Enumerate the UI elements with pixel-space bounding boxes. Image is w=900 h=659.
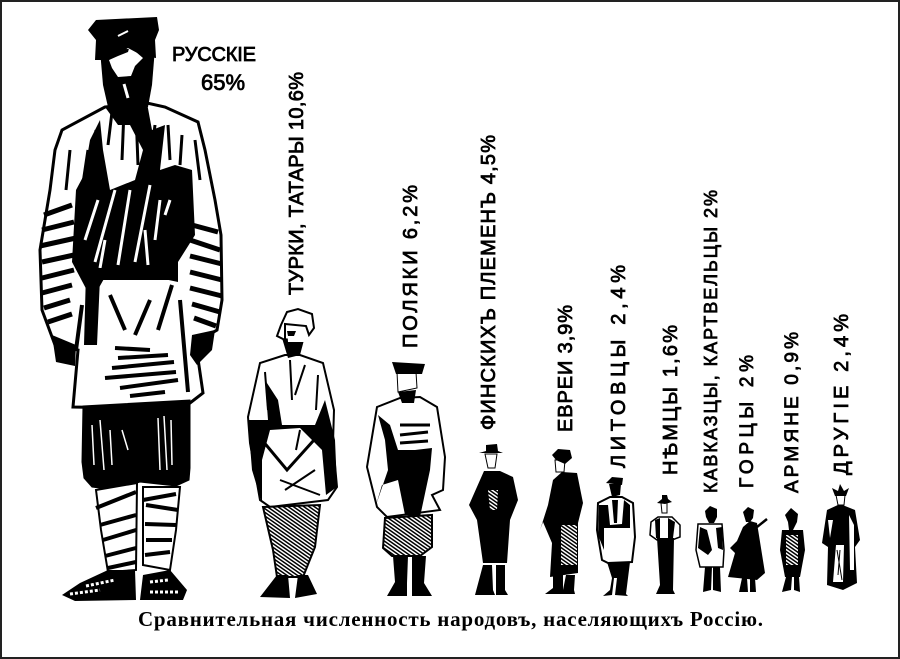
Turk: beard — [282, 338, 304, 358]
Caucasian: robe shading — [698, 527, 723, 555]
label: Russians: 65% — [201, 70, 245, 95]
Turk: robe streaks — [265, 360, 320, 495]
Caucasian: legs — [703, 567, 721, 592]
figure: Finn — [469, 444, 518, 595]
figure: Others — [822, 484, 860, 590]
Caucasian: hat and face — [705, 506, 717, 523]
label: Highlanders: ГОРЦЫ 2% — [737, 355, 758, 488]
Turk: robe shading — [248, 380, 337, 503]
Finn: face — [485, 454, 497, 468]
figure: Caucasian — [696, 506, 724, 592]
Jew: legs and feet — [545, 575, 575, 594]
Russian: chest streaks — [66, 110, 200, 190]
Russian: shirt shading — [72, 103, 195, 300]
Finn: hat — [479, 444, 503, 453]
label: Finnish tribes: ФИНСКИХЪ ПЛЕМЕНЪ 4,5% — [478, 135, 500, 430]
Jew: coat — [540, 472, 583, 577]
Turk: crossed hands — [262, 440, 314, 470]
German: trousers — [656, 538, 675, 594]
Russian: beard and neck — [100, 48, 155, 107]
Armenian: legs — [782, 577, 800, 592]
figure: Pole — [367, 362, 445, 596]
Turk: turban — [277, 309, 314, 340]
Pole: chest stripes — [400, 425, 430, 443]
German: face — [661, 503, 667, 513]
German: vest — [655, 518, 675, 538]
Armenian: coat — [780, 530, 805, 577]
Turk: trousers — [263, 505, 320, 577]
Russian: cap — [88, 17, 159, 60]
Russian: bast shoes — [62, 570, 187, 601]
Turk: face — [287, 326, 304, 342]
Russian: shoe detail — [70, 580, 178, 594]
label: Caucasians, Kartvelians: КАВКАЗЦЫ, КАРТВЕЛЬЦЫ 2% — [701, 190, 721, 493]
Finn: shirt detail — [488, 490, 498, 510]
figure: Highlander — [728, 507, 767, 592]
Others: hat — [832, 484, 849, 496]
Russian: mouth highlight — [124, 84, 128, 98]
Pole: coat shading — [376, 415, 432, 517]
Highlander: hat and head — [743, 507, 754, 522]
Highlander: cloak — [728, 521, 765, 580]
Lithuanian: legs and boots — [603, 562, 630, 596]
figure: Russian — [40, 17, 222, 601]
German: hat — [657, 495, 672, 504]
label: Poles: ПОЛЯКИ 6,2% — [400, 185, 422, 348]
Russian: face — [109, 45, 143, 77]
Turk: eyes — [287, 331, 296, 336]
figure: Lithuanian — [597, 477, 635, 596]
Caucasian: robe — [696, 524, 724, 567]
label: Armenians: АРМЯНЕ 0,9% — [782, 332, 803, 493]
Russian: trousers — [82, 400, 190, 490]
Lithuanian: shirt — [597, 497, 635, 563]
Pole: boots — [387, 556, 432, 596]
Russian: wrapping bands — [96, 492, 178, 568]
Russian: shirt — [40, 103, 222, 408]
Lithuanian: face — [609, 484, 621, 497]
Others: texture — [837, 550, 842, 580]
Russian: white folds in dark mass — [85, 185, 170, 268]
Turk: shoes — [260, 575, 317, 598]
label: Russians: РУССКІЕ — [172, 44, 256, 66]
label: Germans: НѢМЦЫ 1,6% — [660, 325, 682, 475]
Lithuanian: shading — [598, 500, 630, 550]
Russian: cap highlights — [118, 31, 128, 36]
Jew: hat — [552, 449, 572, 464]
Russian: sleeve folds — [40, 205, 222, 326]
Jew: coat texture — [561, 525, 577, 565]
Pole: face — [397, 372, 417, 392]
Jew: face — [555, 460, 565, 472]
label: Others: ДРУГІЕ 2,4% — [831, 314, 853, 475]
Turk: robe — [248, 355, 337, 507]
Highlander: legs — [739, 578, 756, 592]
figure: Jew — [540, 449, 583, 594]
label: Jews: ЕВРЕИ 3,9% — [555, 305, 577, 432]
Finn: boots — [475, 565, 508, 595]
figure: German — [650, 495, 680, 594]
figure: Armenian — [780, 508, 805, 592]
label: Turks, Tatars: ТУРКИ, ТАТАРЫ 10,6% — [286, 72, 308, 295]
Armenian: coat texture — [786, 535, 798, 565]
German: shirt and sleeves — [650, 517, 680, 540]
Others: face — [836, 495, 845, 505]
Others: robe highlights — [828, 515, 854, 582]
Russian: apron folds — [76, 285, 188, 396]
caption: Сравнительная численность народовъ, населяющихъ Россію. — [138, 607, 763, 631]
label: Lithuanians: ЛИТОВЦЫ 2,4% — [608, 265, 630, 468]
Pole: trousers — [383, 515, 432, 556]
Pole: beard — [398, 390, 416, 403]
Pole: cap — [392, 362, 425, 374]
label: Russians — [172, 44, 256, 95]
Russian: trouser streaks — [92, 416, 172, 470]
Pole: coat — [367, 397, 445, 517]
Others: robe — [822, 504, 860, 590]
Armenian: hat and head — [785, 508, 798, 530]
Highlander: rifle — [757, 519, 767, 527]
figure: Turk — [248, 309, 337, 598]
Russian: belt and hands — [52, 268, 215, 366]
Lithuanian: cap — [606, 477, 623, 485]
Russian: leg wrappings — [96, 483, 180, 572]
Finn: jacket — [469, 471, 518, 563]
